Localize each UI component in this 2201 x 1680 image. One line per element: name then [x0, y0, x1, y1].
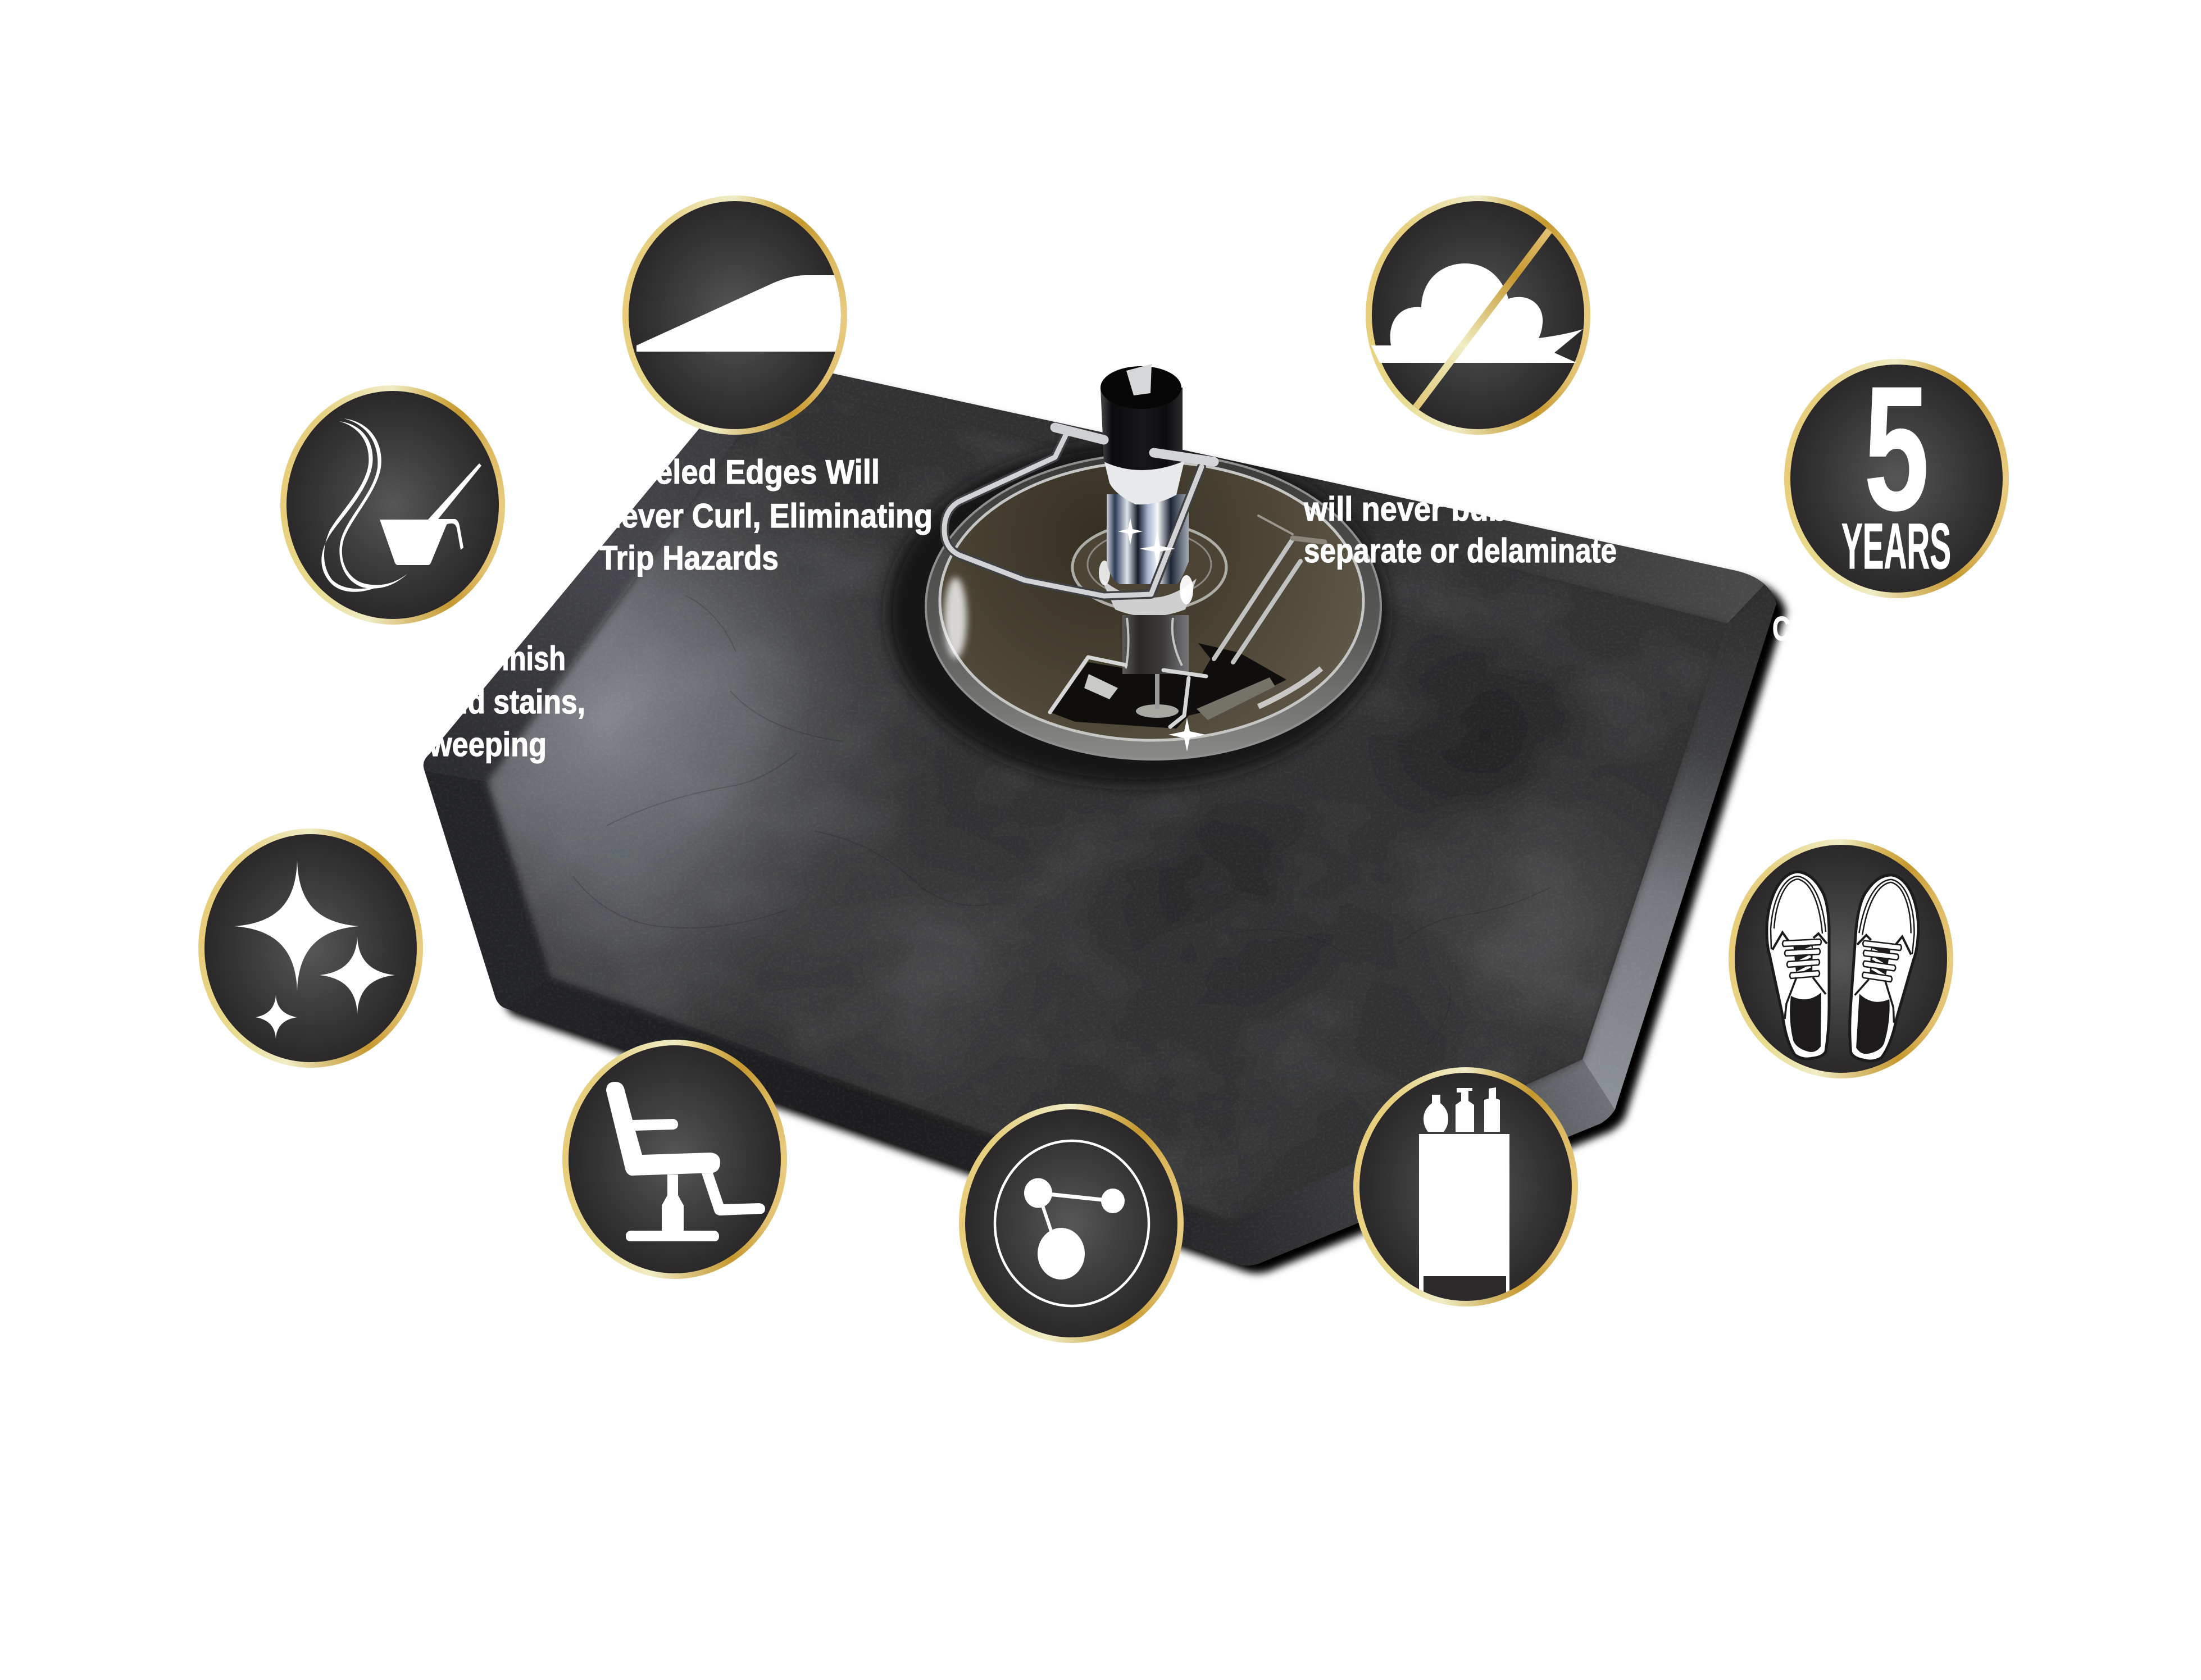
text: beveled edges: Never Curl, Eliminating — [599, 497, 933, 535]
icon: cart and bottles — [1353, 1067, 1578, 1306]
mat drop shadow — [454, 365, 1786, 1273]
icon: base layout — [959, 1104, 1184, 1343]
icon: bevel profile — [636, 275, 841, 352]
icon: 5 years — [1841, 349, 1951, 582]
badge: styling chair — [562, 1040, 787, 1279]
text: finish — [413, 640, 585, 763]
leather creases — [573, 595, 1550, 928]
icon: sparkles — [198, 828, 423, 1068]
white band — [1104, 459, 1184, 504]
badge: no bubbling — [1366, 195, 1590, 435]
stool base and hydraulic column — [926, 364, 1381, 759]
chrome column — [1107, 494, 1189, 584]
text: beveled edges: Beveled Edges Will — [599, 453, 880, 491]
badge: cart compatibility — [1353, 1067, 1578, 1306]
icon: 5 years: YEARS — [1841, 511, 1951, 582]
badge: 5 year warranty — [1784, 359, 2009, 598]
black cylinder — [1100, 388, 1183, 470]
icon: salon chair — [562, 1040, 787, 1279]
text: beveled edges: Trip Hazards — [599, 539, 779, 577]
sparkle highlights — [1168, 718, 1206, 752]
text: durability: separate or delaminate — [1304, 532, 1617, 570]
text: durability: will never bubble, — [1303, 490, 1559, 528]
mat surface and bevels — [424, 374, 1776, 1265]
shaft — [1126, 364, 1152, 395]
flange — [1072, 523, 1226, 611]
icon: pair of shoes — [1729, 839, 1953, 1078]
floor mat — [393, 337, 1798, 1292]
text: comfort: Comfort — [1772, 610, 1868, 648]
lower stem — [1122, 615, 1189, 674]
reflection on disc — [1050, 643, 1286, 729]
cup under column — [1101, 579, 1197, 617]
text: finish: sweeping — [413, 726, 547, 763]
badge: stool base cutout — [959, 1104, 1184, 1343]
icon: crossed-out bubble — [1371, 228, 1583, 410]
foot ring and levers — [944, 427, 1325, 727]
base disc — [926, 454, 1381, 759]
stool recess shadow — [888, 442, 1388, 785]
badge: comfort underfoot — [1729, 839, 1953, 1078]
text: beveled edges — [599, 453, 933, 577]
infographic canvas — [198, 195, 2009, 1343]
badge: color and chemical resistance — [280, 385, 505, 625]
icon: 5 years: 5 — [1864, 349, 1929, 547]
icon: hair and dye bowl — [321, 418, 481, 592]
text: finish: finish — [493, 640, 566, 677]
badge: easy to clean — [198, 828, 423, 1068]
mat and stool illustration with feature text — [424, 364, 1792, 1280]
text: durability — [1303, 490, 1617, 570]
badge: beveled edge — [622, 195, 847, 435]
text: finish: and stains, — [434, 683, 585, 721]
